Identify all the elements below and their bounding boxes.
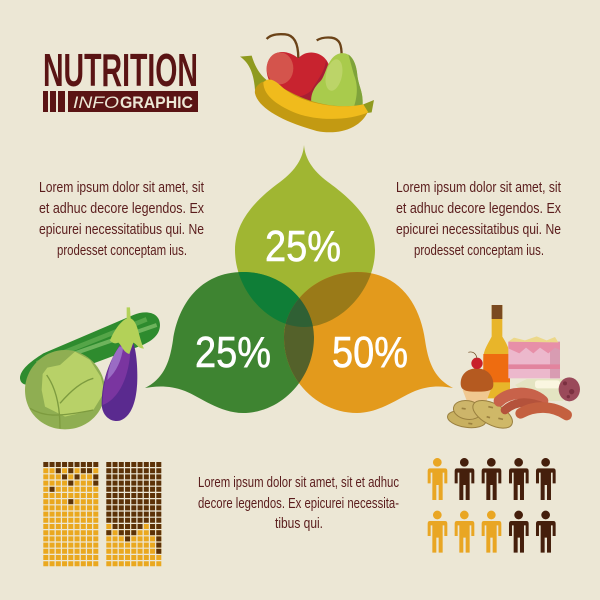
paragraph: bottom centre — [198, 474, 399, 532]
title: NUTRITION: NUTRITION — [43, 44, 198, 96]
subtitle bar — [68, 91, 198, 112]
paragraph: top right: prodesset conceptam ius. — [414, 242, 544, 259]
icon: indulgent foods group — [446, 305, 580, 434]
paragraph: top left: Lorem ipsum dolor sit amet, sit — [39, 179, 205, 196]
chart: pixel grid 1 — [43, 464, 98, 564]
paragraph: bottom centre: decore legendos. Ex epicurei necessita- — [198, 495, 399, 512]
petal: left 25% — [145, 272, 314, 413]
chart: pixel grid 2 — [106, 464, 161, 564]
paragraph: top left — [39, 179, 205, 259]
subtitle: GRAPHIC: GRAPHIC — [120, 93, 193, 112]
subtitle: INFO: INFO — [73, 93, 119, 112]
paragraph: bottom centre: tibus qui. — [275, 515, 323, 532]
subtitle stripes — [43, 91, 65, 112]
paragraph: top right: Lorem ipsum dolor sit amet, sit — [396, 179, 562, 196]
paragraph: bottom centre: Lorem ipsum dolor sit amet, sit et adhuc — [198, 474, 399, 491]
paragraph: top right — [396, 179, 562, 259]
paragraph: top left: prodesset conceptam ius. — [57, 242, 187, 259]
value: left 25%: 25% — [195, 328, 271, 377]
paragraph: top left: et adhuc decore legendos. Ex — [39, 200, 204, 217]
value: top 25%: 25% — [265, 222, 341, 271]
overlap: all three — [286, 298, 313, 327]
chart: three overlapping petals — [145, 145, 453, 413]
icon: vegetables group — [20, 307, 160, 429]
paragraph: top right: et adhuc decore legendos. Ex — [396, 200, 561, 217]
paragraph: top right: epicurei necessitatibus qui. Ne — [396, 221, 561, 238]
petal: top 25% — [235, 145, 375, 327]
petal: right 50% — [284, 272, 453, 413]
overlap: top and left — [238, 272, 313, 326]
value: right 50%: 50% — [332, 328, 408, 377]
chart: people pictogram — [428, 458, 556, 553]
title block — [43, 44, 198, 112]
overlap: top and right — [286, 272, 371, 326]
overlap: left and right — [284, 298, 314, 383]
paragraph: top left: epicurei necessitatibus qui. Ne — [39, 221, 204, 238]
icon: fruit group — [240, 34, 374, 132]
